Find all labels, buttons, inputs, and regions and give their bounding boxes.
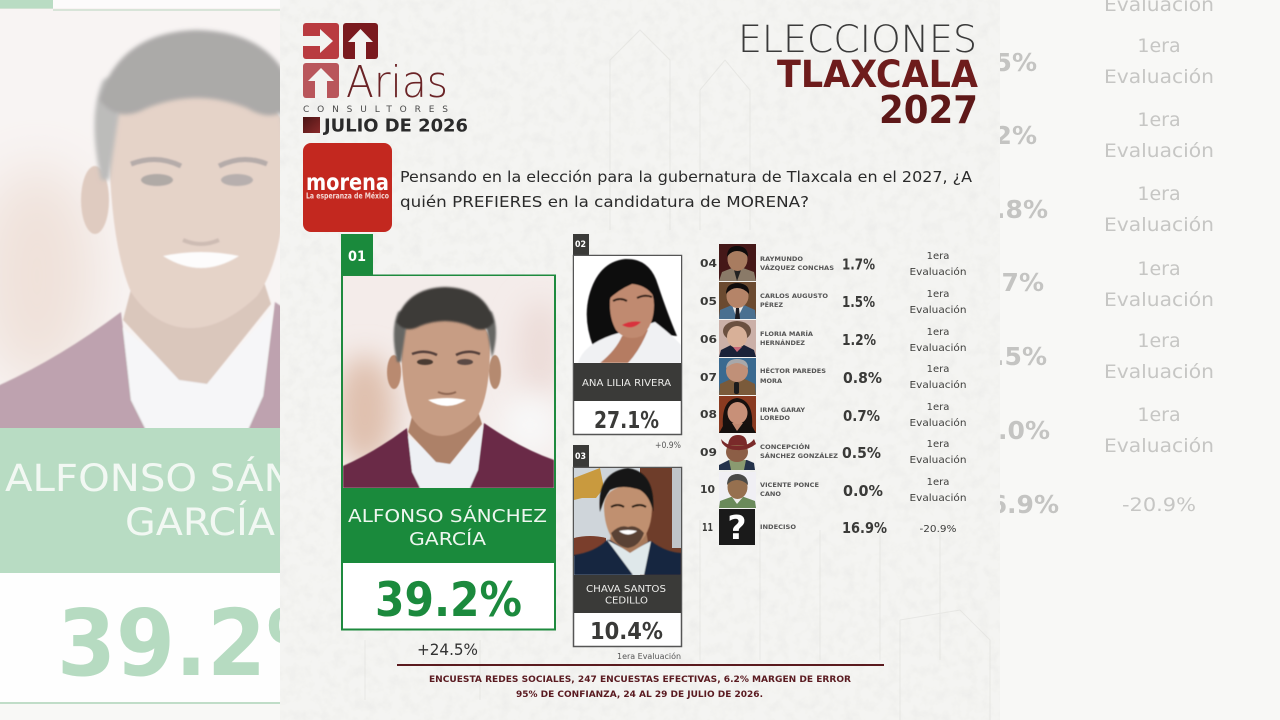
row: candidate 07: Evaluación xyxy=(910,379,966,391)
row: candidate 10: 1era xyxy=(927,477,949,488)
row: candidate 05: 1era xyxy=(927,289,949,300)
photo: Alfonso Sánchez García xyxy=(335,276,562,488)
row: candidate 10: CANO xyxy=(760,490,781,498)
photo: Irma Garay Loredo xyxy=(719,396,756,433)
panel: candidate 03 xyxy=(573,445,682,646)
row: candidate 06: HERNÁNDEZ xyxy=(760,338,805,347)
row: candidate 05: PÉREZ xyxy=(760,300,783,309)
row: undecided: 11 xyxy=(702,521,713,534)
panel: candidate 02 xyxy=(573,234,682,434)
name band: GARCÍA xyxy=(409,528,486,550)
photo: Héctor Paredes Mora xyxy=(719,358,756,395)
row: candidate 08: LOREDO xyxy=(760,414,790,422)
photo: Raymundo Vázquez Conchas xyxy=(719,244,756,281)
percentage: 39.2% xyxy=(375,573,522,628)
row: candidate 07: 07 xyxy=(700,371,717,384)
rank tab 02: 02 xyxy=(575,240,586,250)
name band xyxy=(574,363,681,401)
change label: candidate 02: +0.9% xyxy=(655,441,681,451)
icon: question mark: ? xyxy=(727,508,747,547)
panel: faded left enlargement: ALFONSO SÁNCHEZ xyxy=(5,456,405,500)
panel: faded right enlargement: 1era xyxy=(1137,258,1181,280)
panel: faded right enlargement: 1.2% xyxy=(968,121,1037,150)
row: candidate 09: 1era xyxy=(927,439,949,450)
panel: faded right enlargement: 16.9% xyxy=(972,490,1059,519)
panel: faded right enlargement: 1era xyxy=(1137,404,1181,426)
row: undecided xyxy=(702,508,956,547)
row: candidate 05: Evaluación xyxy=(910,304,966,316)
rank tab 03: 03 xyxy=(575,452,586,462)
panel: faded right enlargement: 1era xyxy=(1137,183,1181,205)
percentage: 10.4% xyxy=(590,619,663,645)
panel: faded right enlargement: Evaluación xyxy=(1104,289,1214,311)
row: candidate 06: FLORIA MARÍA xyxy=(760,329,813,338)
title: 2027 xyxy=(879,88,978,132)
row: candidate 07: MORA xyxy=(760,377,782,385)
title xyxy=(738,18,978,132)
row: candidate 07 xyxy=(700,358,966,395)
photo: Chava Santos Cedillo xyxy=(574,468,681,575)
panel: faded right enlargement: 0.5% xyxy=(978,342,1047,371)
row: candidate 06: 1.2% xyxy=(842,331,876,349)
icon: light up arrow square xyxy=(303,63,339,98)
row: candidate 07: 1era xyxy=(927,364,949,375)
survey question: Pensando en la elección para la gubernatura de Tlaxcala en el 2027, ¿A xyxy=(400,168,972,186)
row: candidate 06: 06 xyxy=(700,333,717,346)
row: candidate 09: CONCEPCIÓN xyxy=(760,442,810,451)
title: TLAXCALA xyxy=(777,53,978,96)
photo: Vicente Ponce Cano xyxy=(719,474,756,508)
panel: candidate 01 xyxy=(335,234,562,630)
panel: faded right enlargement: -20.9% xyxy=(1122,494,1196,516)
row: candidate 04: 1era xyxy=(927,251,949,262)
row: candidate 08: 1era xyxy=(927,402,949,413)
icon: right arrow square xyxy=(303,23,339,59)
row: candidate 06 xyxy=(700,320,966,357)
panel: faded right enlargement: Evaluación xyxy=(1104,140,1214,162)
logo: Arias Consultores xyxy=(303,23,448,115)
row: candidate 04 xyxy=(700,244,966,281)
row: candidate 08 xyxy=(700,396,966,433)
name band: CEDILLO xyxy=(605,596,648,606)
change label: candidate 03: 1era Evaluación xyxy=(617,651,681,661)
name band: ANA LILIA RIVERA xyxy=(582,378,671,389)
row: candidate 06: Evaluación xyxy=(910,342,966,354)
panel: main paper background xyxy=(280,0,1000,720)
logo: Arias Consultores: CONSULTORES xyxy=(303,105,448,115)
survey question xyxy=(400,168,972,211)
row: candidate 10: Evaluación xyxy=(910,492,966,504)
row: candidate 04: VÁZQUEZ CONCHAS xyxy=(760,263,834,272)
logo: Morena: La esperanza de México xyxy=(306,192,389,200)
rank tab 02 xyxy=(573,234,589,255)
row: candidate 09: 09 xyxy=(700,446,717,459)
row: candidate 05 xyxy=(700,282,966,319)
footer: methodology note xyxy=(397,664,884,700)
logo: Morena: morena xyxy=(306,170,389,196)
photo: Carlos Augusto Pérez xyxy=(719,282,756,319)
change label: candidate 01: +24.5% xyxy=(417,640,478,659)
panel: faded right enlargement: 1era xyxy=(1137,35,1181,57)
footer: methodology note: ENCUESTA REDES SOCIALES, 247 ENCUESTAS EFECTIVAS, 6.2% MARGEN DE ERROR xyxy=(429,675,851,685)
panel: faded right enlargement: Evaluación xyxy=(1104,361,1214,383)
photo: Ana Lilia Rivera xyxy=(574,256,681,363)
row: undecided: -20.9% xyxy=(920,524,956,535)
panel: faded right enlargement: Evaluación xyxy=(1104,66,1214,88)
row: candidate 07: HÉCTOR PAREDES xyxy=(760,366,826,375)
rank tab 03 xyxy=(573,445,589,467)
footer: methodology note: 95% DE CONFIANZA, 24 AL 29 DE JULIO DE 2026. xyxy=(516,690,763,700)
rank tab 01 xyxy=(341,234,373,276)
panel: faded left enlargement: GARCÍA xyxy=(125,500,275,544)
panel: faded right enlargement: 1.5% xyxy=(968,48,1037,77)
row: candidate 10: 10 xyxy=(700,483,715,496)
row: candidate 09: 0.5% xyxy=(842,444,881,462)
row: candidate 05: 05 xyxy=(700,295,717,308)
row: candidate 06: 1era xyxy=(927,327,949,338)
row: candidate 10 xyxy=(700,472,966,508)
survey question: quién PREFIERES en la candidatura de MORENA? xyxy=(400,193,809,211)
row: candidate 04: 04 xyxy=(700,257,717,270)
row: candidate 09: SÁNCHEZ GONZÁLEZ xyxy=(760,451,838,460)
logo: Morena xyxy=(303,143,392,232)
row: candidate 08: IRMA GARAY xyxy=(760,406,805,414)
photo: Floria María Hernández xyxy=(719,320,756,357)
photo: Concepción Sánchez González xyxy=(719,435,756,470)
panel: faded right enlargement: Evaluación xyxy=(1104,435,1214,457)
name band: CHAVA SANTOS xyxy=(586,584,666,595)
row: candidate 09: Evaluación xyxy=(910,454,966,466)
row: candidate 08: 08 xyxy=(700,408,717,421)
row: candidate 08: Evaluación xyxy=(910,417,966,429)
row: candidate 10: VICENTE PONCE xyxy=(760,481,819,489)
percentage: 27.1% xyxy=(594,408,659,434)
row: candidate 08: 0.7% xyxy=(843,407,880,425)
panel: faded right enlargement: 1era xyxy=(1137,330,1181,352)
row: candidate 04: Evaluación xyxy=(910,266,966,278)
name band xyxy=(574,575,681,613)
rank tab 01: 01 xyxy=(348,249,366,265)
icon: question mark xyxy=(719,508,755,547)
row: undecided: 16.9% xyxy=(842,519,887,537)
panel: faded right enlargement: 0.7% xyxy=(975,268,1044,297)
panel: faded right enlargement: 0.0% xyxy=(981,416,1050,445)
row: candidate 04: RAYMUNDO xyxy=(760,255,803,263)
name band: ALFONSO SÁNCHEZ xyxy=(348,505,547,527)
row: candidate 10: 0.0% xyxy=(843,482,883,500)
panel: faded left enlargement: 39.2% xyxy=(57,590,351,697)
panel: faded right enlargement xyxy=(1000,0,1280,720)
logo: Arias Consultores: Arias xyxy=(346,57,448,108)
row: candidate 05: CARLOS AUGUSTO xyxy=(760,292,828,300)
title: ELECCIONES xyxy=(738,18,977,61)
row: undecided: INDECISO xyxy=(760,523,796,531)
name band xyxy=(341,488,555,563)
panel: faded right enlargement: 0.8% xyxy=(979,195,1048,224)
date label: JULIO DE 2026 xyxy=(322,116,468,136)
row: candidate 09 xyxy=(700,433,966,470)
row: candidate 04: 1.7% xyxy=(842,256,875,274)
row: candidate 05: 1.5% xyxy=(842,293,875,311)
row: candidate 07: 0.8% xyxy=(843,369,882,387)
icon: dark up arrow square xyxy=(343,23,378,59)
panel: faded right enlargement: Evaluación xyxy=(1104,214,1214,236)
panel: faded left enlargement xyxy=(0,0,280,720)
panel: faded right enlargement: 1era xyxy=(1137,109,1181,131)
